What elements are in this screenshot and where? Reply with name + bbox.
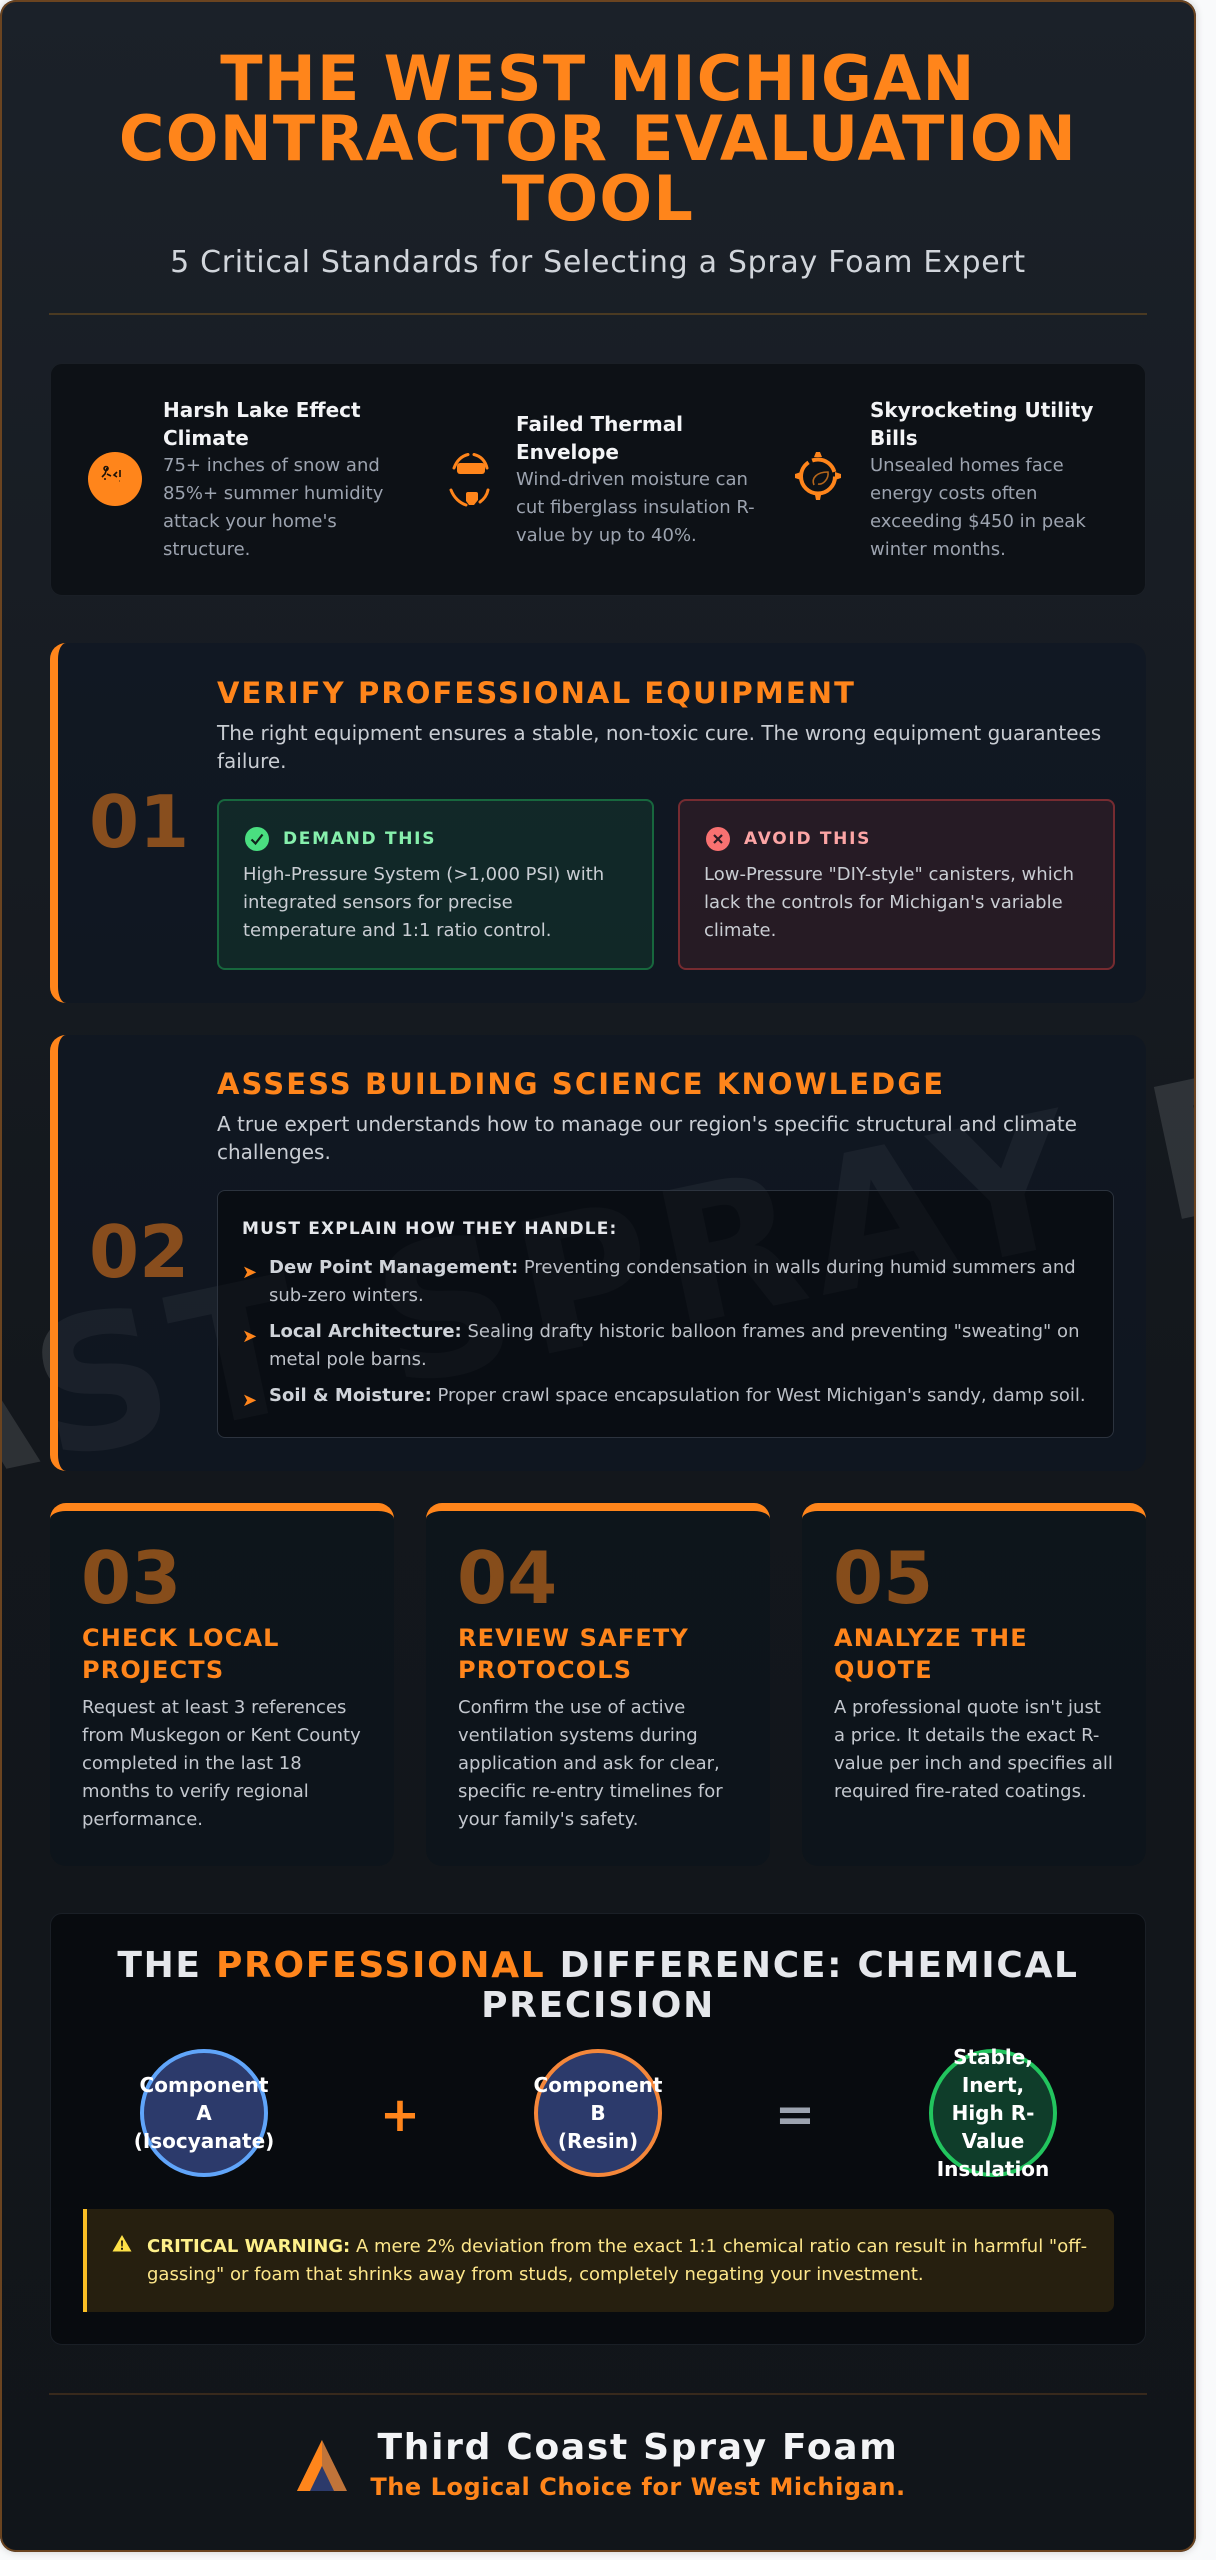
title: TOOL [502, 162, 694, 235]
circle: result: High R- [952, 2101, 1034, 2125]
panel: chemical precision [50, 1913, 1146, 2345]
description [217, 1112, 1077, 1164]
text: Low-Pressure "DIY-style" canisters, which [704, 864, 1074, 885]
text: utility bills: energy costs often [870, 483, 1037, 504]
text: your family's safety. [458, 1809, 638, 1830]
number 05: 05 [833, 1536, 933, 1620]
text: months to verify regional [82, 1781, 309, 1802]
warning text: CRITICAL WARNING: A mere 2% deviation from the exact 1:1 chemical ratio can result in harmful "off- [147, 2236, 1087, 2257]
equals sign: = [775, 2087, 815, 2143]
text: harsh climate [163, 398, 383, 560]
description: A true expert understands how to manage our region's specific structural and climate [217, 1112, 1077, 1136]
label: AVOID THIS [744, 829, 871, 849]
logo [297, 2440, 347, 2491]
text: utility bills: Skyrocketing Utility [870, 398, 1093, 422]
text: High-Pressure System (>1,000 PSI) with [243, 864, 604, 885]
text: A professional quote isn't just [834, 1697, 1101, 1718]
text: harsh climate: Climate [163, 426, 249, 450]
text: temperature and 1:1 ratio control. [243, 920, 551, 941]
heading: VERIFY PROFESSIONAL EQUIPMENT [217, 676, 856, 710]
text: application and ask for clear, [458, 1753, 720, 1774]
panel: demand this [217, 799, 654, 970]
text: Request at least 3 references [82, 1697, 346, 1718]
text: integrated sensors for precise [243, 892, 513, 913]
label: DEMAND THIS [283, 829, 436, 849]
circle: component B: Component [534, 2073, 662, 2097]
text [704, 864, 1074, 941]
panel: step 03 [50, 1503, 394, 1866]
text: lack the controls for Michigan's variable [704, 892, 1063, 913]
icon: snow climate [88, 452, 142, 506]
icon: cross [706, 827, 730, 851]
subtitle: 5 Critical Standards for Selecting a Spray Foam Expert [170, 245, 1026, 280]
warning text: gassing" or foam that shrinks away from studs, completely negating your investment. [147, 2264, 924, 2285]
label: MUST EXPLAIN HOW THEY HANDLE: [242, 1219, 617, 1239]
text: harsh climate: 85%+ summer humidity [163, 483, 383, 504]
text: performance. [82, 1809, 203, 1830]
text: value per inch and specifies all [834, 1753, 1113, 1774]
text [458, 1697, 723, 1830]
arrow: ➤ [242, 1262, 257, 1283]
list item [269, 1257, 1076, 1306]
text: failed envelope: Failed Thermal [516, 412, 683, 436]
description: challenges. [217, 1140, 331, 1164]
text: failed envelope: Wind-driven moisture can [516, 469, 748, 490]
text: harsh climate: Harsh Lake Effect [163, 398, 361, 422]
icon: thermal envelope [449, 453, 490, 506]
text: ventilation systems during [458, 1725, 698, 1746]
description: The right equipment ensures a stable, non-toxic cure. The wrong equipment guarantees [217, 721, 1101, 745]
company name: Third Coast Spray Foam [378, 2427, 898, 2468]
circle: component A: A [196, 2101, 212, 2125]
text [243, 864, 604, 941]
panel: step 02 [50, 1035, 1146, 1471]
text: harsh climate: attack your home's [163, 511, 337, 532]
text: failed envelope: cut fiberglass insulation R- [516, 497, 755, 518]
text: utility bills: Bills [870, 426, 918, 450]
text: from Muskegon or Kent County [82, 1725, 361, 1746]
text: utility bills: Unsealed homes face [870, 455, 1064, 476]
text: completed in the last 18 [82, 1753, 302, 1774]
heading: ANALYZE THE [834, 1624, 1028, 1652]
number 02: 02 [89, 1210, 189, 1294]
list item: sub-zero winters. [269, 1285, 424, 1306]
heading: REVIEW SAFETY [458, 1624, 689, 1652]
arrow: ➤ [242, 1390, 257, 1411]
panel: three problems [50, 363, 1146, 596]
icon: check [245, 827, 269, 851]
text: utility bills: winter months. [870, 539, 1006, 560]
heading [458, 1624, 689, 1684]
circle: result: Stable, [953, 2045, 1033, 2069]
circle: component A: Component [140, 2073, 268, 2097]
panel: must explain [217, 1190, 1114, 1438]
list item: Dew Point Management: Preventing condensation in walls during humid summers and [269, 1257, 1076, 1278]
circle: component B: B [590, 2101, 606, 2125]
panel: step 05 [802, 1503, 1146, 1866]
number 03: 03 [81, 1536, 181, 1620]
heading: PROJECTS [82, 1656, 224, 1684]
text: failed envelope: value by up to 40%. [516, 525, 697, 546]
text: specific re-entry timelines for [458, 1781, 723, 1802]
text [834, 1697, 1113, 1802]
circle: result [929, 2049, 1057, 2177]
panel: step 01 [50, 643, 1146, 1003]
description [216, 721, 1101, 773]
circle: component B: (Resin) [558, 2129, 638, 2153]
list item: Local Architecture: Sealing drafty historic balloon frames and preventing "sweating" on [269, 1321, 1079, 1342]
panel: avoid this [678, 799, 1115, 970]
heading: QUOTE [834, 1656, 933, 1684]
text: required fire-rated coatings. [834, 1781, 1087, 1802]
circle: component B [534, 2049, 662, 2177]
heading: ASSESS BUILDING SCIENCE KNOWLEDGE [217, 1067, 945, 1101]
text: utility bills [870, 398, 1093, 560]
tagline: The Logical Choice for West Michigan. [370, 2473, 906, 2501]
text: failed envelope: Envelope [516, 440, 619, 464]
panel: step 04 [426, 1503, 770, 1866]
list item [269, 1321, 1079, 1370]
text [82, 1697, 361, 1830]
text: utility bills: exceeding $450 in peak [870, 511, 1086, 532]
heading: PROTOCOLS [458, 1656, 632, 1684]
text: Confirm the use of active [458, 1697, 685, 1718]
title [119, 42, 1077, 235]
warning text [147, 2236, 1087, 2285]
circle: result: Inert, [962, 2073, 1024, 2097]
heading: PRECISION [481, 1985, 715, 2026]
circle: component A [140, 2049, 268, 2177]
plus sign: + [380, 2087, 420, 2143]
title: CONTRACTOR EVALUATION [119, 102, 1077, 175]
circle: result: Insulation [937, 2157, 1049, 2181]
heading [834, 1624, 1028, 1684]
heading: CHECK LOCAL [82, 1624, 280, 1652]
arrow: ➤ [242, 1326, 257, 1347]
text: climate. [704, 920, 776, 941]
heading [82, 1624, 280, 1684]
number 04: 04 [457, 1536, 557, 1620]
number 01: 01 [89, 780, 189, 864]
text: harsh climate: structure. [163, 539, 250, 560]
heading: THE PROFESSIONAL DIFFERENCE: CHEMICAL [117, 1945, 1079, 1986]
critical warning [83, 2209, 1114, 2312]
list item: Soil & Moisture: Proper crawl space encapsulation for West Michigan's sandy, damp soil. [269, 1385, 1086, 1406]
icon: warning [112, 2235, 132, 2252]
text: a price. It details the exact R- [834, 1725, 1099, 1746]
description: failure. [217, 749, 287, 773]
list item: metal pole barns. [269, 1349, 427, 1370]
circle: component A: (Isocyanate) [134, 2129, 274, 2153]
circle: result: Value [962, 2129, 1024, 2153]
text: harsh climate: 75+ inches of snow and [163, 455, 380, 476]
text: failed envelope [516, 412, 755, 546]
title: THE WEST MICHIGAN [220, 42, 976, 115]
heading [117, 1945, 1079, 2026]
icon: utility bills [795, 452, 841, 500]
